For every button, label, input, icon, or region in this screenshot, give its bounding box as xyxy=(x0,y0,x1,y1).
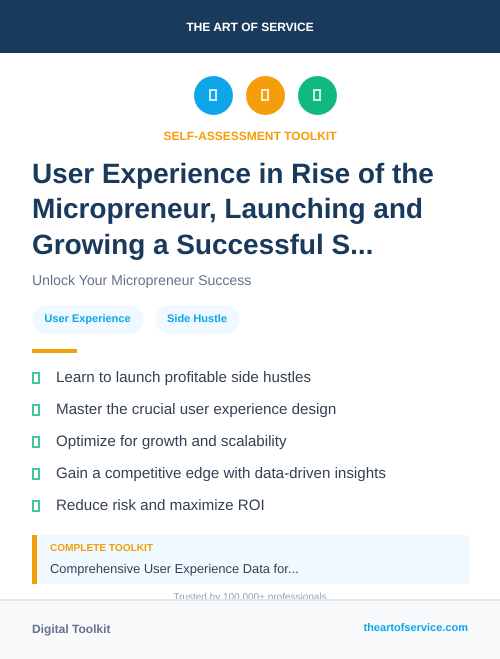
main title: Micropreneur, Launching and xyxy=(32,193,423,224)
main title: Growing a Successful S... xyxy=(32,229,373,260)
main title xyxy=(32,158,434,260)
callout label: COMPLETE TOOLKIT xyxy=(50,543,153,554)
icon: orange circle xyxy=(246,76,285,115)
tag: User Experience xyxy=(32,305,144,334)
callout text: Comprehensive User Experience Data for... xyxy=(50,561,299,576)
icon: green circle xyxy=(298,76,337,115)
eyebrow label: SELF-ASSESSMENT TOOLKIT xyxy=(163,129,337,143)
trust line: Trusted by 100,000+ professionals xyxy=(173,592,327,603)
header bar: THE ART OF SERVICE xyxy=(186,20,314,34)
benefit 2: Master the crucial user experience design xyxy=(56,401,336,418)
tag: Side Hustle xyxy=(155,305,240,334)
benefit 4: Gain a competitive edge with data-driven insights xyxy=(56,465,386,482)
tag: Side Hustle: Side Hustle xyxy=(167,313,227,325)
footer link: theartofservice.com xyxy=(363,622,468,634)
benefit 3: Optimize for growth and scalability xyxy=(56,433,287,450)
footer xyxy=(0,599,500,659)
tag: User Experience: User Experience xyxy=(44,313,131,325)
benefit 5: Reduce risk and maximize ROI xyxy=(56,497,265,514)
benefits list xyxy=(32,369,386,514)
header bar xyxy=(0,0,500,53)
icon: blue circle xyxy=(194,76,233,115)
main title: User Experience in Rise of the xyxy=(32,158,434,189)
subtitle: Unlock Your Micropreneur Success xyxy=(32,272,251,288)
icon row xyxy=(194,76,337,115)
benefit 1: Learn to launch profitable side hustles xyxy=(56,369,311,386)
footer label: Digital Toolkit xyxy=(32,622,110,636)
accent divider xyxy=(32,349,77,353)
callout: complete toolkit xyxy=(32,535,469,584)
